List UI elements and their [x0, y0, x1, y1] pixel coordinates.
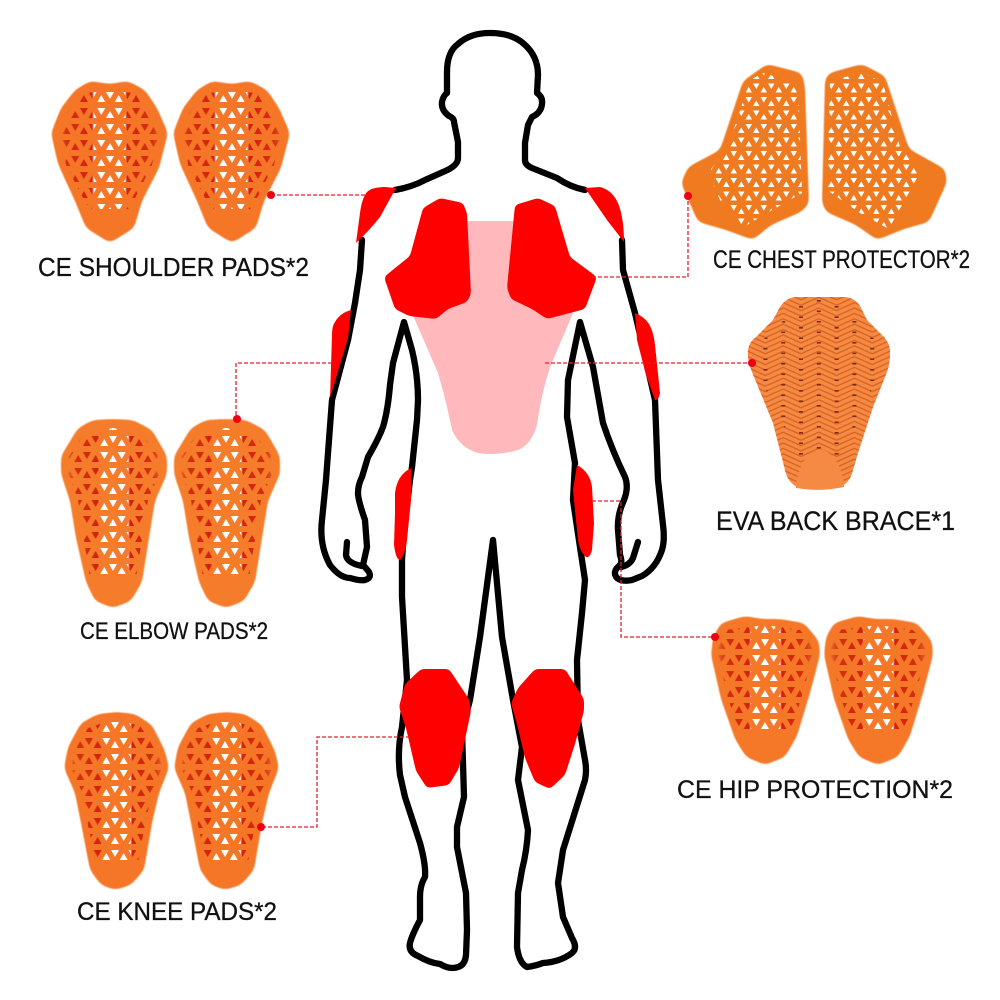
- label: shoulder pads: CE SHOULDER PADS*2: [38, 252, 309, 282]
- icon: left hip pad: [711, 616, 820, 765]
- label: elbow pads: CE ELBOW PADS*2: [80, 618, 268, 645]
- panel: elbow pads: [61, 419, 280, 645]
- icon: right chest plate: [820, 60, 947, 240]
- icon: left knee pad: [64, 712, 169, 890]
- icon: right elbow pad: [174, 419, 280, 608]
- icon: EVA back brace: [748, 297, 890, 490]
- knee zones: [399, 669, 584, 789]
- elbow zones: [330, 310, 660, 400]
- panel: shoulder pads: [38, 81, 309, 282]
- panel: knee pads: [64, 712, 279, 926]
- icon: right hip pad: [824, 616, 933, 765]
- label: knee pads: CE KNEE PADS*2: [77, 898, 277, 926]
- shoulder zones: [356, 187, 624, 243]
- back protection zone: [412, 221, 573, 454]
- panel: chest protector: [681, 60, 970, 274]
- panel: body diagram: [321, 33, 664, 968]
- icon: left elbow pad: [61, 419, 167, 608]
- panel: hip protection: [677, 616, 953, 804]
- body outline: [321, 33, 664, 968]
- label: hip protection: CE HIP PROTECTION*2: [677, 776, 953, 804]
- callout lines and dots: [233, 191, 756, 831]
- panel: back brace: [716, 297, 955, 536]
- icon: right knee pad: [174, 712, 279, 890]
- icon: left chest plate: [681, 60, 810, 240]
- icon: right shoulder pad: [173, 81, 290, 243]
- icon: left shoulder pad: [51, 81, 168, 243]
- chest zones: [384, 198, 597, 319]
- hip zones: [394, 465, 594, 560]
- label: back brace: EVA BACK BRACE*1: [716, 506, 955, 536]
